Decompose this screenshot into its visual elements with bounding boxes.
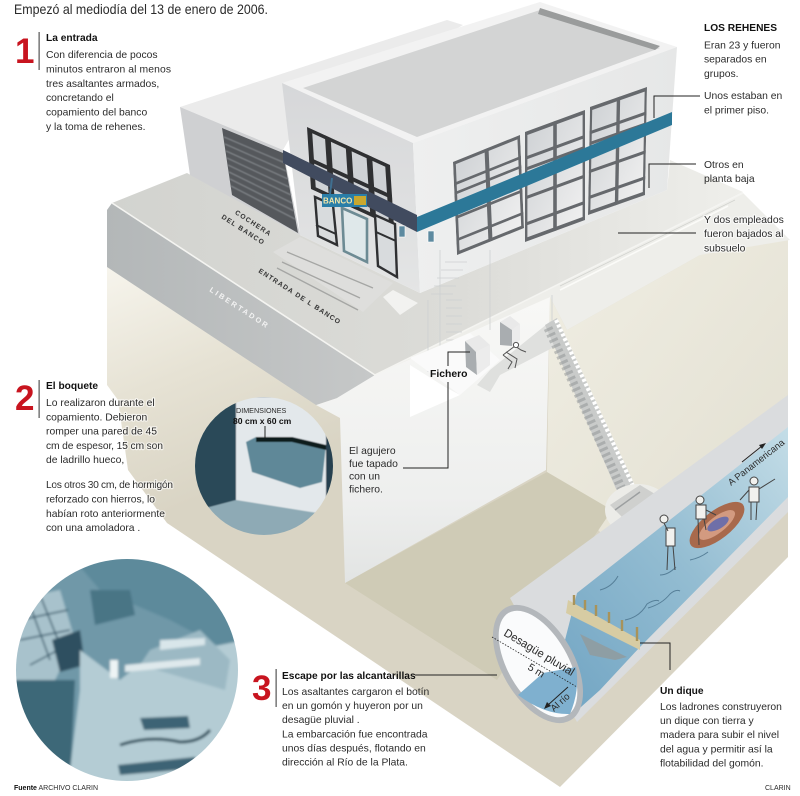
dark band on left facade — [283, 150, 417, 232]
text: el boquete: copamiento. Debieron — [46, 412, 147, 423]
text: el boquete: reforzado con hierros, lo — [46, 494, 155, 506]
text: el agujero: fue tapado — [349, 459, 398, 470]
divider bar 1 — [39, 32, 40, 70]
photo: hole in the wall: 80 cm x 60 cm — [233, 416, 292, 426]
text: la entrada: La entrada — [46, 33, 98, 44]
source credit: Fuente ARCHIVO CLARIN — [14, 785, 98, 792]
photo: hole in the wall — [195, 397, 333, 535]
text: el boquete: con una amoladora . — [46, 523, 140, 534]
text: los rehenes: separados en — [704, 55, 767, 66]
text: los rehenes: Eran 23 y fueron — [704, 40, 781, 52]
roller shutter garage door — [222, 128, 298, 233]
text: la entrada: copamiento del banco — [46, 108, 147, 119]
text: el agujero: fichero. — [349, 484, 383, 495]
text: la entrada: minutos entraron al menos — [46, 64, 171, 75]
text: la entrada: Con diferencia de pocos — [46, 50, 158, 61]
pipe label: A Panamericana with arrow: A Panamericana — [725, 436, 787, 488]
pipe body — [510, 395, 788, 722]
waves — [600, 552, 708, 620]
text: un dique: Los ladrones construyeron — [660, 702, 782, 713]
text: un dique: Un dique — [660, 686, 704, 697]
number 1: 1 — [15, 32, 34, 71]
leader: subsuelo — [618, 232, 696, 234]
step 2: el boquete — [15, 379, 173, 534]
text: la entrada: y la toma de rehenes. — [46, 122, 145, 133]
text: el boquete: Los otros 30 cm, de hormigón — [46, 480, 173, 491]
entrance steps — [273, 237, 393, 312]
leader: dique — [640, 643, 670, 670]
text: escape por las alcantarillas: unos días después, flotando en — [282, 743, 426, 754]
text: escape por las alcantarillas: Escape por las alcantarillas — [282, 671, 416, 682]
filing cabinet large — [465, 335, 490, 375]
leader: primer piso — [654, 96, 700, 118]
text: el boquete: romper una pared de 45 — [46, 427, 157, 438]
text: escape por las alcantarillas: Los asaltantes cargaron el botín — [282, 687, 429, 698]
main building right face — [413, 47, 677, 293]
text: los rehenes: LOS REHENES — [704, 23, 777, 34]
text: un dique: del agua y permitir así la — [660, 744, 773, 755]
pipe label: Al río with arrow: Al río — [549, 691, 572, 714]
text: el boquete: habían roto anteriormente — [46, 509, 165, 520]
text: subsuelo: fueron bajados al — [704, 229, 783, 240]
ground white wedge of the hole — [410, 365, 460, 417]
blue band on right facade — [417, 112, 672, 232]
text: el boquete: El boquete — [46, 381, 98, 392]
text: el boquete: Lo realizaron durante el — [46, 398, 155, 409]
inflatable raft with loot — [682, 494, 752, 556]
title: Empezó al mediodía del 13 de enero de 2006. — [14, 2, 268, 17]
main building left face — [282, 83, 420, 293]
text: primer piso: el primer piso. — [704, 105, 769, 116]
number 3: 3 — [252, 669, 271, 708]
text: la entrada: tres asaltantes armados, — [46, 79, 159, 90]
thief left — [660, 515, 675, 570]
step 3: escape — [252, 669, 429, 768]
water in pipe — [545, 427, 788, 715]
river dam — [566, 595, 640, 660]
small wall signs — [399, 226, 434, 242]
pipe label: Desagüe pluvial: Desagüe pluvial — [501, 627, 576, 679]
crawling man — [503, 342, 526, 369]
text: el boquete: cm de espesor, 15 cm son — [46, 441, 163, 452]
sloped tunnel shaft — [545, 318, 636, 498]
pipe diameter dashed line — [492, 637, 577, 687]
text: la entrada: concretando el — [46, 93, 114, 104]
tunnel ledge — [477, 320, 558, 392]
step 1: la entrada — [15, 32, 171, 133]
text: subsuelo: Y dos empleados — [704, 215, 784, 226]
text: planta baja: Otros en — [704, 160, 744, 171]
text: el agujero: El agujero — [349, 446, 396, 457]
main building roof — [282, 2, 677, 143]
thief right — [740, 477, 775, 520]
photo: hole in the wall: DIMENSIONES — [236, 406, 287, 415]
street slab surface — [112, 160, 743, 375]
thief center — [696, 496, 716, 545]
text: escape por las alcantarillas: en un gomón y huyeron por un — [282, 701, 423, 712]
label: fichero: Fichero — [430, 369, 468, 380]
text: escape por las alcantarillas: desagüe pluvial . — [282, 715, 360, 726]
pipe end opening — [474, 590, 602, 738]
text: un dique: un dique con tierra y — [660, 716, 755, 727]
text: el boquete: de ladrillo hueco, — [46, 455, 124, 466]
text: subsuelo: subsuelo — [704, 243, 746, 254]
text: un dique: flotabilidad del gomón. — [660, 758, 764, 769]
leader: fichero — [403, 352, 470, 468]
bank sign: BANCO — [323, 196, 352, 206]
divider bar 3 — [276, 669, 277, 707]
divider bar 2 — [39, 380, 40, 418]
underground white wall — [316, 297, 550, 583]
leader: planta baja — [649, 164, 696, 188]
text: el agujero: con un — [349, 472, 380, 483]
credit: Clarín: CLARIN — [765, 785, 791, 792]
left facade windows and door — [307, 127, 397, 277]
street label: cochera del banco — [220, 205, 273, 247]
number 2: 2 — [15, 379, 34, 418]
street label: cochera del banco: DEL BANCO — [220, 214, 266, 247]
right upper and lower windows — [453, 87, 647, 255]
annex building — [180, 20, 463, 235]
filing cabinet small — [500, 316, 520, 346]
underground block: beige soil — [107, 238, 788, 787]
text: primer piso: Unos estaban en — [704, 91, 782, 102]
bank sign — [322, 178, 367, 207]
leader: escape to pipe — [415, 674, 497, 676]
street label: cochera del banco: COCHERA — [233, 209, 273, 238]
text: un dique: madera para subir el nivel — [660, 730, 779, 741]
slab front strip — [375, 193, 790, 375]
text: planta baja: planta baja — [704, 174, 755, 185]
street side face with avenue — [107, 203, 375, 405]
pipe label: 5 m: 5 m — [525, 661, 547, 681]
text: escape por las alcantarillas: La embarcación fue encontrada — [282, 729, 428, 740]
text: los rehenes: grupos. — [704, 69, 739, 80]
street label: entrada del banco: ENTRADA DE L BANCO — [257, 268, 342, 326]
ghost stairs going down — [428, 250, 552, 372]
street label: Libertador: LIBERTADOR — [208, 285, 271, 331]
photo: raft and tools — [10, 555, 245, 785]
tunnel bulb junction — [605, 484, 671, 536]
access ramp — [383, 290, 418, 315]
text: escape por las alcantarillas: dirección al Río de la Plata. — [282, 758, 408, 768]
